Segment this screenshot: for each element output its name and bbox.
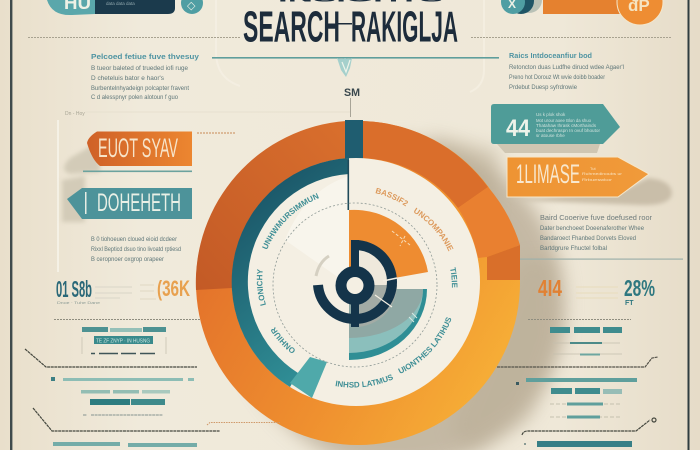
bar group: left middle	[51, 377, 194, 415]
top-left badge: data data data	[106, 1, 135, 6]
text block: upper right	[509, 51, 624, 91]
bar group: bottom left	[53, 442, 197, 447]
segment: upper left dark orange	[196, 121, 346, 290]
decorative glow curves	[216, 0, 484, 92]
teal rule under title	[212, 57, 499, 59]
orange dotted leader: lower	[207, 422, 280, 425]
text block: upper right: Raics Intdoceanfiur bod	[509, 51, 592, 60]
curved labels: ONHIUR	[271, 326, 295, 353]
text block: upper right: Retoncton duas Ludfhe dirucd wdee Agaer'l	[509, 64, 624, 71]
arrow label: orange left: EUOT SYAV	[98, 133, 178, 163]
bar group: left upper: TE ZF ZNYP · IN HUSNG	[96, 338, 150, 344]
stat: left orange	[140, 276, 190, 301]
arrow label: teal left	[67, 188, 192, 219]
text block: upper left: D cheteluis bator e haor's	[91, 75, 164, 82]
title: SEARCH	[243, 2, 340, 52]
bar group: left upper	[82, 327, 166, 354]
arrow label: teal left: DOHEHETH	[97, 189, 181, 217]
icon: center chevron	[337, 58, 352, 77]
curved labels: BASSIF2	[376, 188, 408, 206]
arrow label: teal right: sr atouse rbhe	[536, 133, 565, 138]
leader line: right lower	[522, 418, 656, 435]
shadow: donut	[235, 135, 565, 450]
arrow label: teal right: Thatahaw Ihrask cMorthainds	[536, 123, 597, 128]
text block: mid right: Bandaroect Fhanbed Dorvets Eloved	[540, 235, 637, 242]
dotted rules beside title	[28, 36, 672, 38]
orange quarter	[349, 210, 428, 285]
stat: left teal: Dnoe · Tuhe Dane	[57, 300, 101, 305]
top notch	[345, 120, 363, 160]
stat: right orange: 4I4	[538, 275, 562, 301]
arrow label: orange left	[87, 132, 192, 166]
leader line: right upper	[497, 357, 658, 367]
shadow: orange arrow	[510, 178, 672, 205]
text block: mid left: B 0 tiohoeuen cloued eioid dcdeer	[91, 236, 177, 243]
curved labels: INHSD LATMUS	[336, 374, 393, 388]
segment: top right orange	[363, 121, 488, 208]
stat: right teal	[624, 275, 655, 307]
teal quarter bands	[349, 289, 427, 360]
text block: upper right: Prdebut Duesp syfrdrowie	[509, 84, 578, 91]
stat: right teal: 28%	[624, 275, 655, 301]
teal rule under orange arrow	[83, 170, 192, 172]
text block: mid left	[91, 236, 181, 263]
segment: right light orange	[458, 187, 520, 258]
arrow label: teal right	[491, 104, 620, 144]
leader line: left upper	[25, 349, 197, 367]
text block: upper left: C d alesspnyr polen alotoun f guo	[91, 94, 179, 101]
arrow label: orange right: Rrbueswkor	[582, 177, 613, 182]
arrow label: orange right	[507, 157, 649, 197]
arrow label: teal right: Mot urour aoee Blon da shuo	[536, 118, 591, 123]
text block: mid right: Baird Cooerive fuve doefused roor	[540, 215, 653, 222]
dotted rule: right	[528, 318, 631, 320]
shadow: arrow blobs left	[62, 143, 100, 222]
curved labels	[256, 188, 458, 388]
bar group: right middle	[516, 378, 637, 418]
top-right badge	[501, 0, 663, 25]
stat: left teal: 01 S8b	[56, 276, 92, 302]
text block: mid right: Dater benchoeet Doeenaferother Whee	[540, 225, 645, 232]
text block: mid left: B ceropnoer oxgrop orapeer	[91, 256, 164, 263]
segment: right dark block	[487, 245, 520, 280]
dark axis line	[348, 160, 349, 210]
rule: mid right	[520, 258, 683, 260]
arrow label: teal right: buat dechraspn In ovuf bhoutor	[536, 128, 601, 133]
curved labels: TIEIE	[450, 267, 458, 288]
curved labels: UIONTHES LATIHUS	[398, 317, 452, 374]
faint marker and rule, left: Dn - Hoy	[65, 111, 85, 117]
bar group: right upper	[550, 327, 622, 356]
text block: upper right: Preno hot Dorouz Wt wvie doibb boader	[509, 74, 605, 81]
inner cream disc	[232, 158, 480, 406]
curved labels: UNHWMURSIMMUN	[262, 193, 319, 249]
top-left badge: ◇	[187, 0, 196, 12]
stat: right teal: FT	[625, 300, 634, 307]
dotted rule: left	[54, 318, 200, 320]
curved labels: LONICHY	[256, 269, 266, 306]
dashed guide circle	[273, 203, 437, 367]
text block: mid right: Bartdgrure Fhuctel folbal	[540, 245, 607, 252]
bar group: bottom right	[524, 441, 632, 447]
center target	[316, 240, 397, 327]
outer ring base	[196, 121, 520, 445]
arrow label: orange right: 1LIMASE	[516, 159, 580, 189]
center label: SM	[344, 87, 360, 99]
orange dotted leader	[197, 132, 235, 134]
arrow label: teal right: 44	[506, 115, 531, 142]
arrow label: teal right: Us k plok shok	[536, 112, 566, 117]
arrow label: orange right: Tut	[590, 166, 597, 171]
stat: right orange	[538, 275, 618, 301]
teal ring	[232, 158, 349, 387]
arrow label: orange right: Ruhmedinoubs ur	[582, 171, 623, 176]
text block: mid right	[540, 215, 653, 252]
text block: mid left: Rixxl Bepticd dsuo tino livoatd rptiesd	[91, 246, 181, 253]
text block: upper left: Burbentelnhyadeign polcapter fravent	[91, 85, 189, 92]
center label	[344, 87, 360, 117]
text block: upper left: B tueor baleted of trueded iofi ruge	[91, 65, 189, 72]
top-left badge	[47, 0, 203, 15]
shadow: teal arrow	[497, 144, 600, 153]
donut chart	[196, 120, 520, 445]
text block: upper left: Pelcoed fetiue fuve thvesuy	[91, 52, 200, 61]
teal light block	[290, 357, 327, 398]
disc white wedge	[285, 176, 349, 285]
text: RAKIGLJA	[351, 2, 458, 52]
leader line: left lower	[33, 408, 220, 431]
stat: left orange: (36K	[157, 276, 190, 301]
text block: upper left	[91, 52, 200, 101]
